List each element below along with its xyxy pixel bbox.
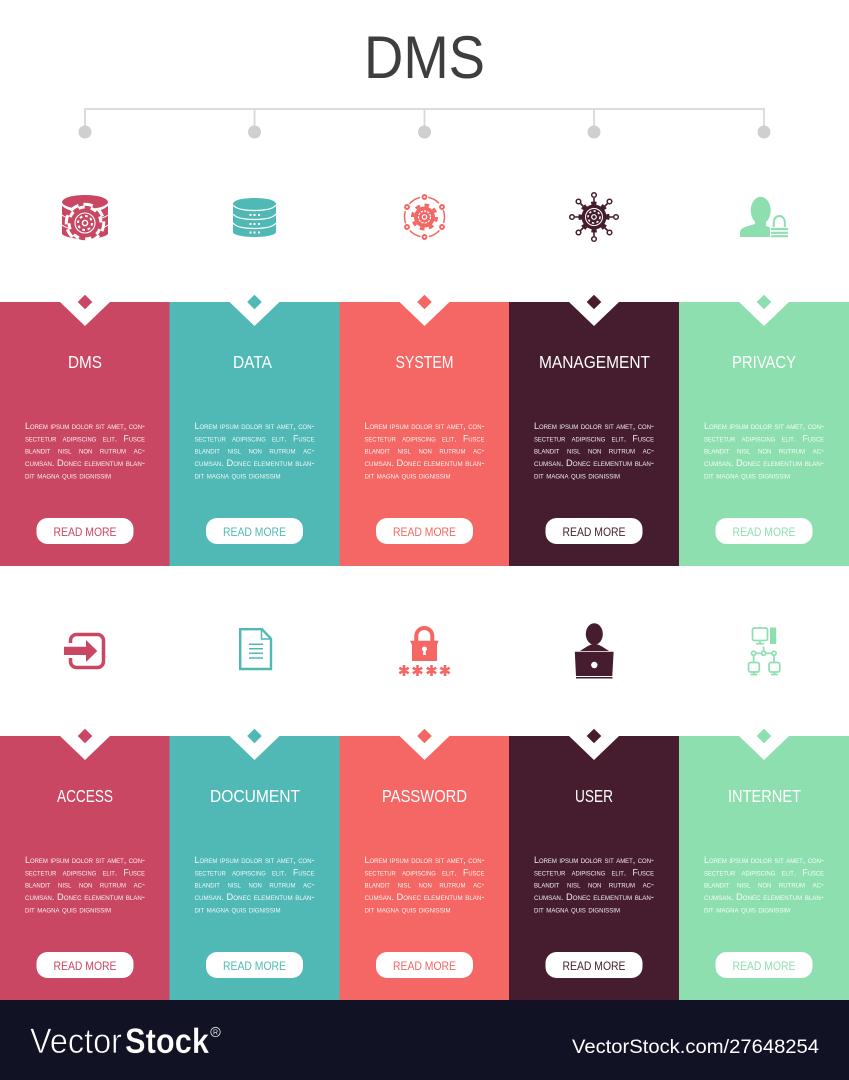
panel: DOCUMENT: dit magna quis dignissim (194, 904, 280, 914)
panel: ACCESS: cumsan. Donec elementum blan- (25, 892, 145, 902)
footer bar: R (213, 1030, 218, 1037)
panel: DMS: DMS (68, 352, 102, 372)
panel: DATA: Lorem ipsum dolor sit amet, con- (194, 421, 314, 431)
panel: DOCUMENT: READ MORE (223, 959, 286, 973)
panel: DATA (170, 295, 340, 566)
panel: ACCESS: READ MORE (54, 959, 116, 973)
panel: INTERNET (679, 729, 849, 1000)
icon: padlock with password (399, 628, 450, 676)
panel: USER: sectetur adipiscing elit. Fusce (534, 867, 654, 877)
panel: ACCESS: blandit nisl non rutrum ac- (25, 880, 145, 890)
panel: SYSTEM: cumsan. Donec elementum blan- (364, 458, 484, 468)
panel: ACCESS: ACCESS (57, 786, 113, 806)
panel: INTERNET: blandit nisl non rutrum ac- (704, 880, 824, 890)
icon: access login arrow (64, 634, 104, 668)
panel: MANAGEMENT: cumsan. Donec elementum blan- (534, 458, 654, 468)
panel: PASSWORD: cumsan. Donec elementum blan- (364, 892, 484, 902)
panel: DOCUMENT: cumsan. Donec elementum blan- (194, 892, 314, 902)
panel: DMS: dit magna quis dignissim (25, 470, 111, 480)
panel: PRIVACY: Lorem ipsum dolor sit amet, con- (704, 421, 824, 431)
panel: DATA: blandit nisl non rutrum ac- (194, 446, 314, 456)
panel: INTERNET: INTERNET (728, 786, 801, 806)
panel: PASSWORD: READ MORE (393, 959, 456, 973)
panel: MANAGEMENT: blandit nisl non rutrum ac- (534, 446, 654, 456)
panel: SYSTEM: Lorem ipsum dolor sit amet, con- (364, 421, 484, 431)
icon: document (240, 629, 271, 669)
panel: DMS: READ MORE (54, 525, 116, 539)
panel: INTERNET: sectetur adipiscing elit. Fusce (704, 867, 824, 877)
panel: SYSTEM: sectetur adipiscing elit. Fusce (364, 433, 484, 443)
panel: DATA: DATA (233, 352, 272, 372)
panel: MANAGEMENT: MANAGEMENT (539, 352, 650, 372)
panel: MANAGEMENT: dit magna quis dignissim (534, 470, 620, 480)
panel: DATA: READ MORE (223, 525, 286, 539)
panel: PRIVACY: dit magna quis dignissim (704, 470, 790, 480)
panel: PRIVACY (679, 295, 849, 566)
panel: DATA: cumsan. Donec elementum blan- (194, 458, 314, 468)
panel: USER: USER (575, 786, 613, 806)
panel: DOCUMENT: blandit nisl non rutrum ac- (194, 880, 314, 890)
panel: DOCUMENT (170, 729, 340, 1000)
panel: PRIVACY: sectetur adipiscing elit. Fusce (704, 433, 824, 443)
panel: DMS: blandit nisl non rutrum ac- (25, 446, 145, 456)
panel: SYSTEM: dit magna quis dignissim (364, 470, 450, 480)
panel: MANAGEMENT (509, 295, 680, 566)
panel: ACCESS: sectetur adipiscing elit. Fusce (25, 867, 145, 877)
icon: system gear cycle (404, 195, 444, 239)
panel: USER: READ MORE (562, 959, 626, 973)
footer bar: Stock (125, 1022, 209, 1061)
panel: MANAGEMENT: READ MORE (562, 525, 626, 539)
panel: USER (509, 729, 680, 1000)
panel: PRIVACY: blandit nisl non rutrum ac- (704, 446, 824, 456)
panel: DOCUMENT: sectetur adipiscing elit. Fusce (194, 867, 314, 877)
panel: DATA: dit magna quis dignissim (194, 470, 280, 480)
icon: management gear network (570, 193, 618, 241)
panel: PASSWORD: dit magna quis dignissim (364, 904, 450, 914)
panel: SYSTEM: READ MORE (393, 525, 456, 539)
panel: PASSWORD: PASSWORD (382, 786, 467, 806)
panel: MANAGEMENT: sectetur adipiscing elit. Fusce (534, 433, 654, 443)
panel: INTERNET: Lorem ipsum dolor sit amet, con- (704, 855, 824, 865)
panel: DMS: Lorem ipsum dolor sit amet, con- (25, 421, 145, 431)
panel: DOCUMENT: DOCUMENT (210, 786, 300, 806)
panel: DMS (0, 295, 170, 566)
panel: USER: dit magna quis dignissim (534, 904, 620, 914)
title: DMS (364, 24, 485, 91)
icon: database server (233, 198, 276, 237)
panel: PASSWORD: sectetur adipiscing elit. Fusce (364, 867, 484, 877)
panel: USER: Lorem ipsum dolor sit amet, con- (534, 855, 654, 865)
icon: user at laptop (575, 623, 614, 678)
panel: PASSWORD: Lorem ipsum dolor sit amet, con- (364, 855, 484, 865)
panel: INTERNET: READ MORE (732, 959, 796, 973)
panel: SYSTEM: SYSTEM (396, 352, 454, 372)
panel: PASSWORD (340, 729, 510, 1000)
footer bar: Vector (30, 1022, 122, 1061)
panel: SYSTEM: blandit nisl non rutrum ac- (364, 446, 484, 456)
panel: MANAGEMENT: Lorem ipsum dolor sit amet, con- (534, 421, 654, 431)
panel: INTERNET: cumsan. Donec elementum blan- (704, 892, 824, 902)
panel: DMS: sectetur adipiscing elit. Fusce (25, 433, 145, 443)
connector timeline with five nodes (78, 109, 770, 138)
footer bar: VectorStock.com/27648254 (572, 1037, 819, 1058)
panel: USER: blandit nisl non rutrum ac- (534, 880, 654, 890)
panel: PRIVACY: PRIVACY (732, 352, 796, 372)
panel: ACCESS: dit magna quis dignissim (25, 904, 111, 914)
panel: SYSTEM (340, 295, 510, 566)
panel: USER: cumsan. Donec elementum blan- (534, 892, 654, 902)
panel: ACCESS (0, 729, 170, 1000)
footer bar (0, 1000, 849, 1080)
panel: PRIVACY: cumsan. Donec elementum blan- (704, 458, 824, 468)
icon: user with padlock (740, 197, 788, 237)
panel: PRIVACY: READ MORE (732, 525, 796, 539)
icon: database with gear (62, 195, 108, 242)
panel: PASSWORD: blandit nisl non rutrum ac- (364, 880, 484, 890)
panel: DMS: cumsan. Donec elementum blan- (25, 458, 145, 468)
panel: DOCUMENT: Lorem ipsum dolor sit amet, con- (194, 855, 314, 865)
panel: DATA: sectetur adipiscing elit. Fusce (194, 433, 314, 443)
icon: internet network (748, 628, 780, 674)
panel: ACCESS: Lorem ipsum dolor sit amet, con- (25, 855, 145, 865)
panel: INTERNET: dit magna quis dignissim (704, 904, 790, 914)
